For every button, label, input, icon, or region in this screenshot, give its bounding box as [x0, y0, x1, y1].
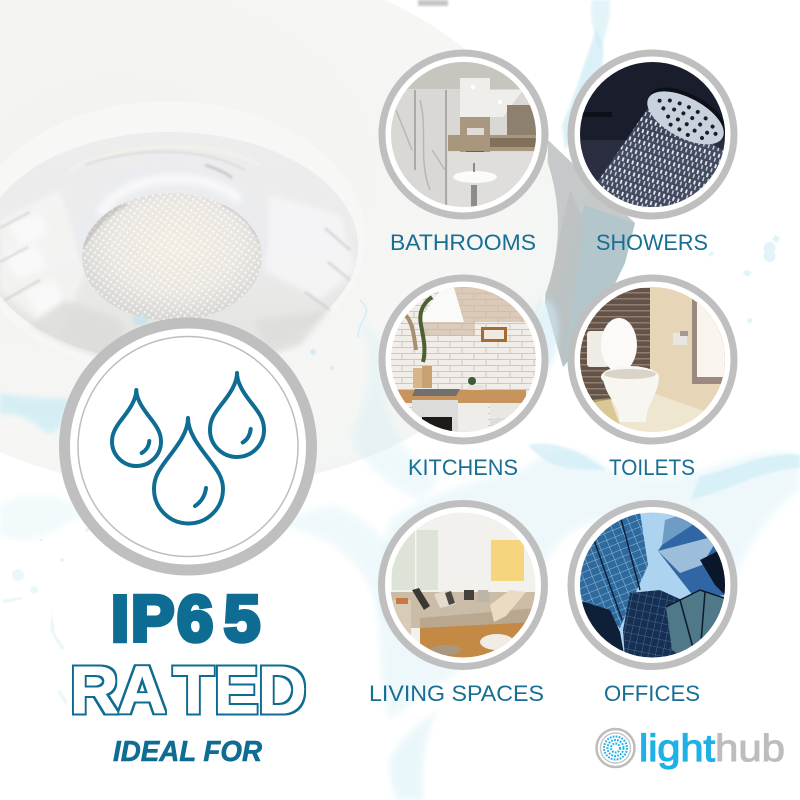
photo: office towers [578, 511, 730, 662]
splash on reflector [132, 315, 148, 325]
label: BATHROOMS [390, 230, 536, 255]
label: SHOWERS [596, 230, 708, 255]
label: TOILETS [609, 455, 695, 480]
logo text: light [639, 728, 715, 770]
label: LIVING SPACES [369, 681, 544, 706]
logo mark [596, 729, 634, 767]
photo: kitchen [390, 286, 538, 436]
driver box [545, 140, 635, 367]
panel: kitchens [382, 278, 545, 480]
neck [76, 162, 268, 314]
label: OFFICES [604, 681, 700, 706]
panel: showers [571, 53, 734, 255]
panel: toilets [571, 278, 734, 480]
logo: lighthub [596, 728, 785, 770]
fixture body [0, 0, 558, 490]
icon: water drops [112, 373, 264, 524]
photo: bathroom [390, 61, 538, 210]
LED lens [80, 190, 265, 325]
fixture clip [418, 0, 448, 6]
splash droplets right of fixture [310, 300, 367, 370]
panel: bathrooms [382, 53, 545, 255]
heading: IP65: IP65 [111, 582, 260, 655]
downlight [0, 147, 358, 356]
label: KITCHENS [408, 455, 518, 480]
panel: IP65 badge [64, 323, 312, 570]
panel: living spaces [369, 504, 544, 706]
water splash behind fixture [562, 0, 780, 324]
photo: shower [579, 61, 734, 210]
reflector [0, 132, 358, 362]
logo: lighthub: hub [715, 728, 785, 770]
water over fixture and page [0, 300, 800, 800]
photo: living room [389, 511, 538, 660]
bezel ring [0, 101, 365, 375]
heading: RATED: RATED [70, 653, 306, 728]
photo: toilet [578, 286, 730, 436]
panel: offices [571, 504, 734, 706]
heading: IDEAL FOR: IDEAL FOR [113, 736, 262, 768]
